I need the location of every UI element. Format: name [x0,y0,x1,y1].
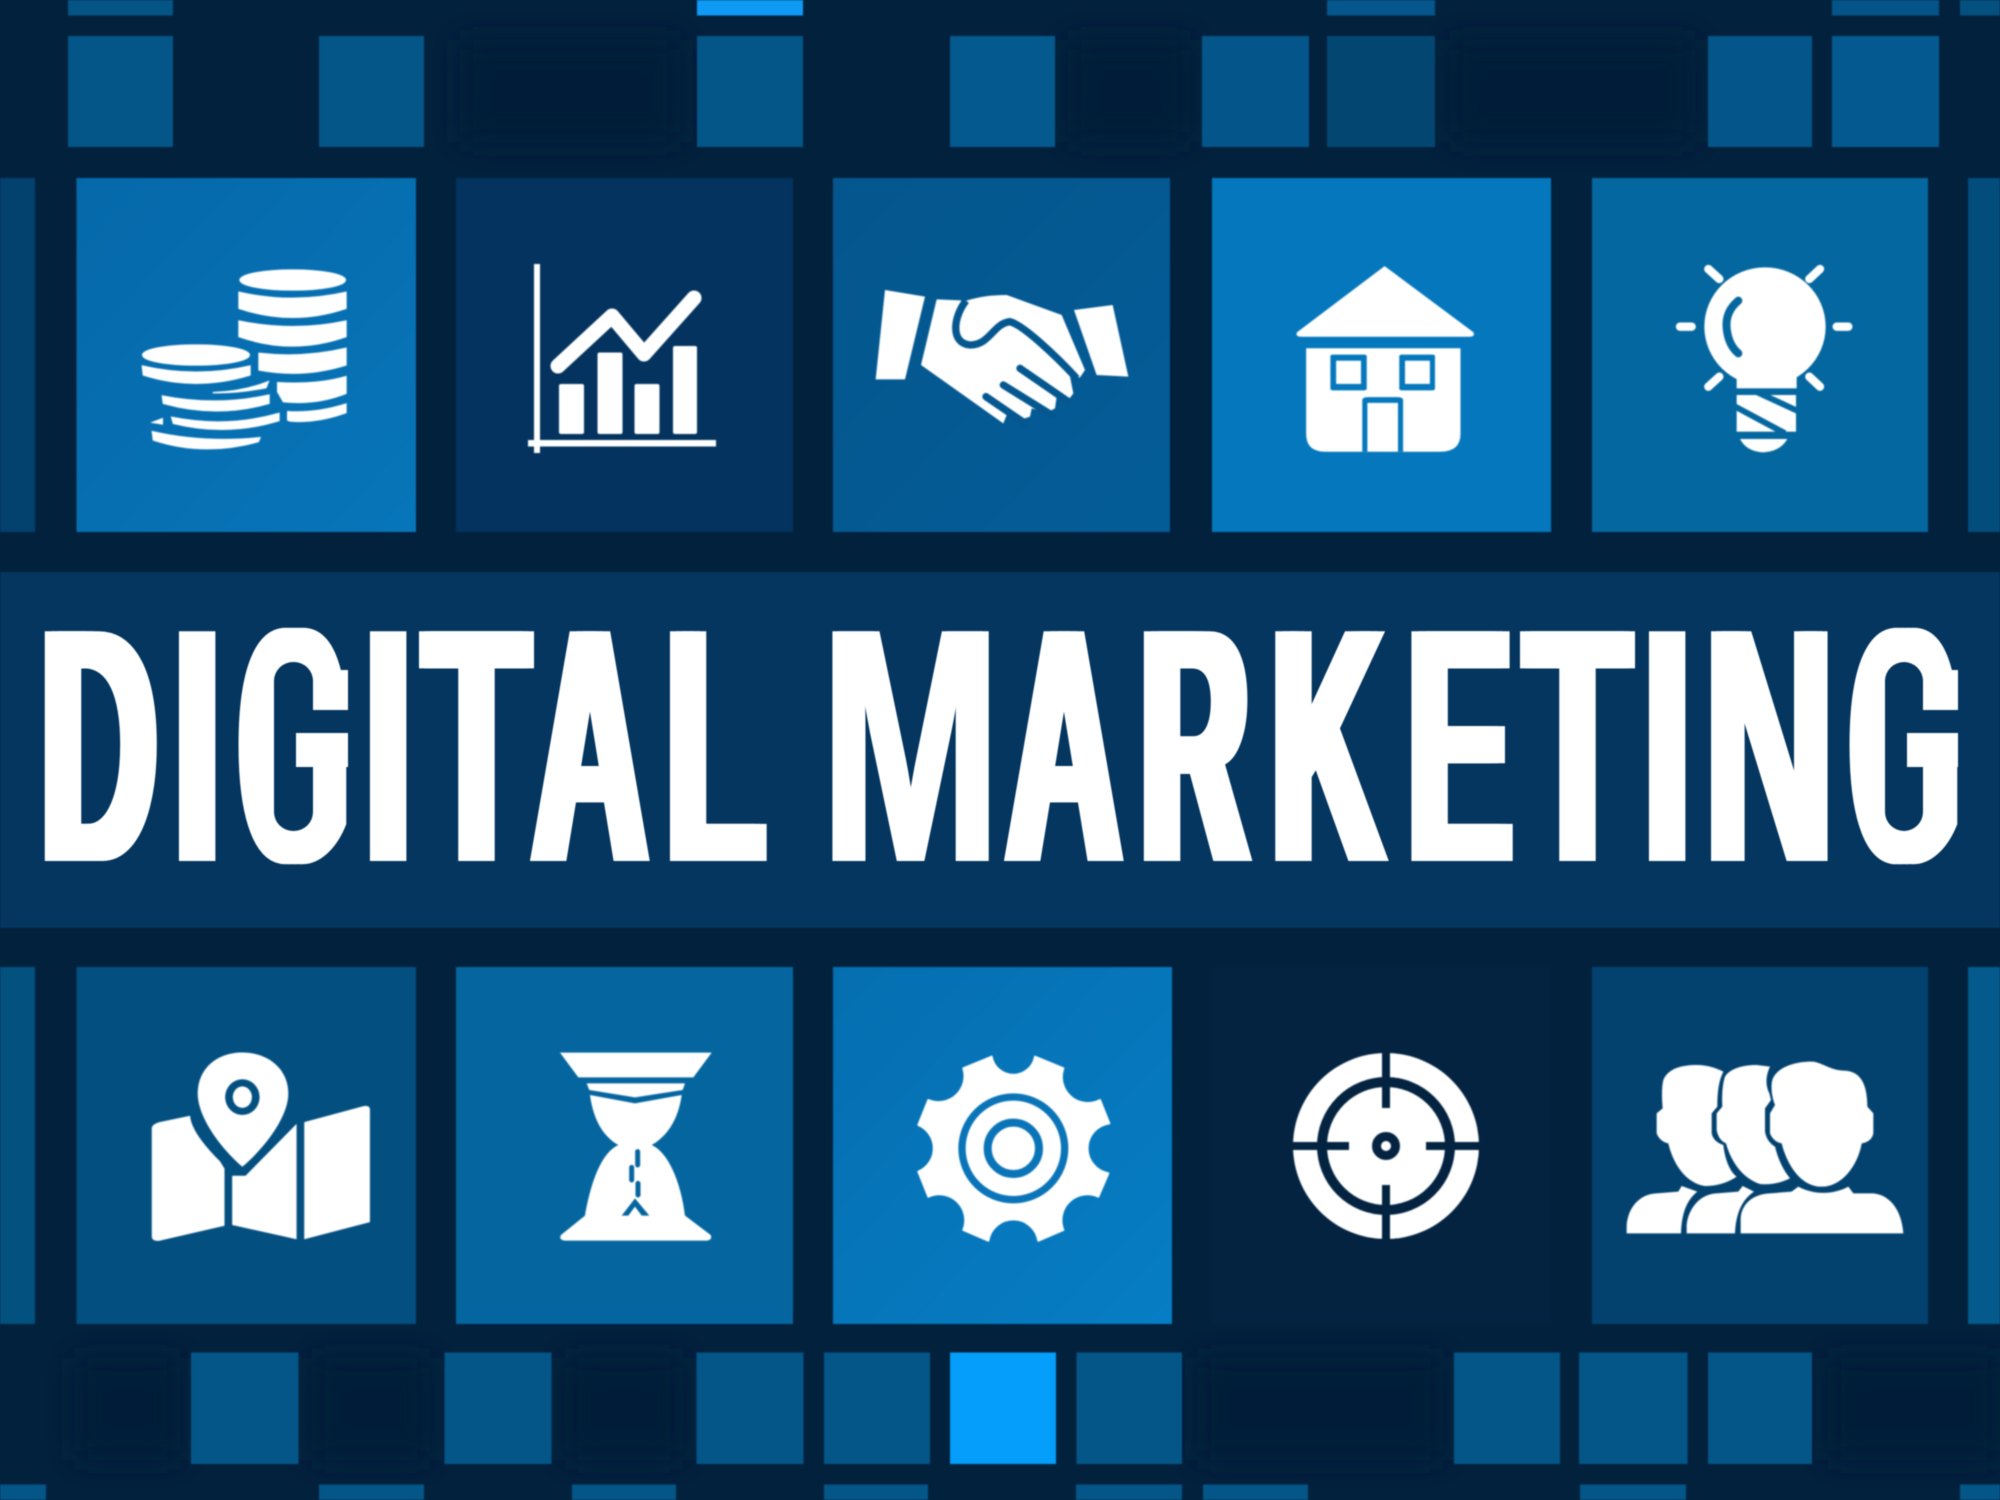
title: DIGITAL MARKETING [34,572,1959,928]
icon: bar chart with trend line [528,264,716,453]
icon: hourglass [560,1053,712,1241]
icon: light bulb [1680,267,1848,452]
icon: group of people [1627,1062,1903,1233]
title band [0,572,2000,928]
small squares: bottom rows [0,1352,2000,1500]
icon: house [1297,266,1474,452]
icon: target crosshair [1293,1053,1481,1239]
icon: coins [142,270,346,449]
small squares: top rows [68,0,2000,147]
icon: handshake [876,290,1128,423]
tile row two [0,967,2000,1324]
icon: map with location pin [152,1052,370,1241]
icon: gear [918,1057,1109,1241]
tile row one [0,178,2000,532]
